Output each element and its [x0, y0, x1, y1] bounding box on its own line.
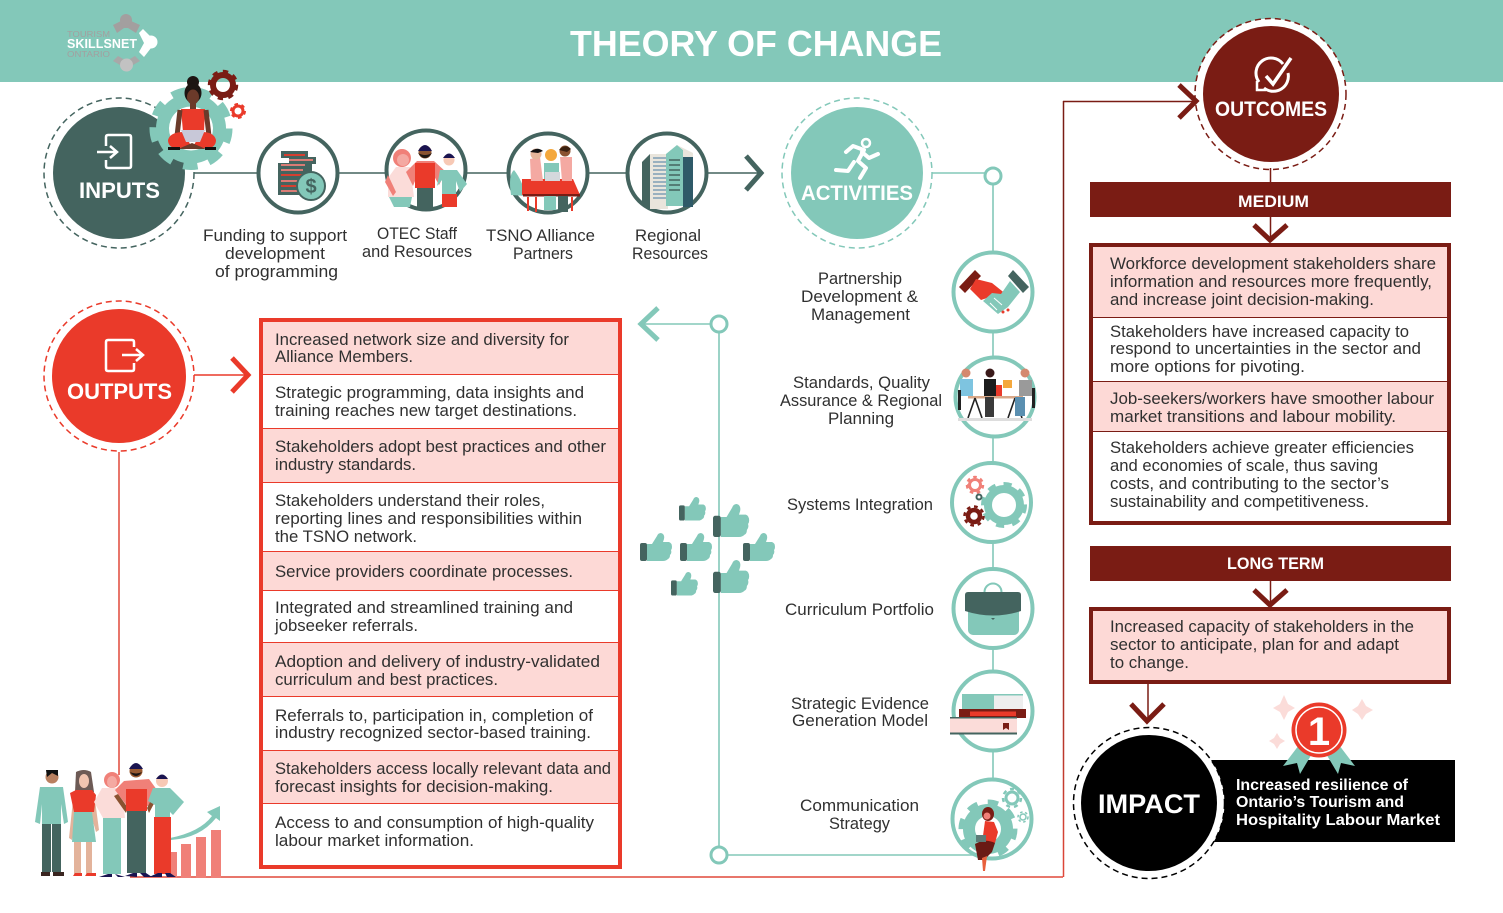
label [801, 269, 919, 324]
label: Assurance & Regional [780, 391, 942, 410]
icon: enter door [97, 135, 131, 168]
label [791, 694, 929, 730]
inputs circle [44, 98, 194, 248]
icon: gears [952, 463, 1031, 542]
icon: check cycle [1256, 58, 1291, 91]
output text rows: Alliance Members. [275, 347, 413, 366]
title: THEORY OF CHANGE [570, 23, 942, 64]
icon: handshake [954, 252, 1032, 332]
person 1 [35, 770, 68, 876]
label: OTEC staff [362, 224, 472, 261]
output text rows: curriculum and best practices. [275, 670, 498, 689]
output text rows: Stakeholders understand their roles, [275, 491, 545, 510]
activity: communication strategy [800, 780, 1032, 871]
output text rows: the TSNO network. [275, 527, 417, 546]
label: regional resources [632, 226, 708, 263]
person 5 [148, 774, 184, 877]
label: regional resources: Regional [635, 226, 701, 245]
medium text rows: and increase joint decision-making. [1110, 290, 1374, 309]
output text rows: industry recognized sector-based training. [275, 723, 591, 742]
activity: partnership [801, 252, 1032, 332]
output text rows: jobseeker referrals. [274, 616, 418, 635]
panel: medium outcomes [1091, 245, 1449, 523]
icon: TSNO alliance partners [508, 134, 588, 212]
arrow: long term [1254, 590, 1287, 605]
outcomes circle: OUTCOMES [1215, 98, 1327, 121]
activity: standards [780, 358, 1035, 436]
label: Communication [800, 796, 919, 815]
icon: meeting [956, 358, 1035, 436]
output text rows: Adoption and delivery of industry-validated [275, 652, 600, 671]
label [780, 373, 942, 428]
output text rows: Referrals to, participation in, completion of [275, 706, 593, 725]
label: regional resources: Resources [632, 244, 708, 263]
label: OTEC staff: OTEC Staff [377, 224, 457, 243]
header banner [0, 0, 1503, 82]
medium text rows: market transitions and labour mobility. [1110, 407, 1396, 426]
medium text rows: respond to uncertainties in the sector and [1110, 339, 1421, 358]
icon: medal number one: 1 [1308, 710, 1330, 754]
medium text rows: and economies of scale, thus saving [1110, 456, 1378, 475]
arrow: to impact [1131, 704, 1164, 721]
heading: medium [1090, 182, 1451, 217]
heading: long term [1090, 546, 1451, 581]
label: Systems Integration [787, 495, 933, 514]
output text rows: Stakeholders access locally relevant data and [275, 759, 611, 778]
label: funding: Funding to support [203, 226, 347, 245]
icon: regional resources [628, 134, 706, 212]
medium text rows [1110, 254, 1436, 511]
label: Strategy [829, 814, 890, 833]
heading: long term: LONG TERM [1227, 554, 1324, 573]
icon: running person [836, 139, 878, 178]
node circles [711, 168, 1001, 863]
panel: long term outcomes [1091, 609, 1449, 682]
medium text rows: Stakeholders have increased capacity to [1110, 322, 1409, 341]
icon: medal number one [1269, 695, 1373, 774]
arrow: outputs [232, 358, 248, 392]
label: Development & [801, 287, 919, 306]
label: Strategic Evidence [791, 694, 929, 713]
connector: inputs row [194, 172, 758, 174]
label: Partnership [818, 269, 902, 288]
bar chart [170, 830, 221, 878]
label: Planning [828, 409, 894, 428]
impact statement bar: Hospitality Labour Market [1236, 812, 1440, 829]
impact circle: IMPACT [1098, 789, 1200, 819]
icon: woman meditating on gears [154, 72, 245, 166]
medium text rows: more options for pivoting. [1110, 357, 1305, 376]
person 4 [114, 763, 158, 877]
label: TSNO alliance partners: TSNO Alliance [486, 226, 595, 245]
icon: OTEC staff [385, 130, 467, 210]
medium text rows: Stakeholders achieve greater efficiencies [1110, 438, 1414, 457]
arrow: medium [1254, 225, 1287, 240]
medium text rows: sustainability and competitiveness. [1110, 492, 1369, 511]
logo: Tourism SkillsNet Ontario: TOURISM [67, 29, 110, 39]
heading: medium: MEDIUM [1238, 192, 1309, 211]
output text rows: training reaches new target destinations. [275, 401, 577, 420]
output text rows: reporting lines and responsibilities within [275, 509, 582, 528]
activity: systems integration [787, 463, 1031, 542]
logo: Tourism SkillsNet Ontario: SKILLSNET [67, 37, 137, 51]
label: Standards, Quality [793, 373, 930, 392]
output text rows: labour market information. [275, 831, 474, 850]
arrow: into outcomes [1179, 85, 1196, 118]
activities circle: ACTIVITIES [801, 182, 913, 205]
label: TSNO alliance partners [486, 226, 595, 263]
outcomes circle [1195, 18, 1346, 170]
illustration: group of people with growth chart [35, 763, 221, 878]
impact statement bar: Ontario’s Tourism and [1236, 794, 1404, 811]
medium text rows: costs, and contributing to the sector’s [1110, 474, 1389, 493]
icon: funding [258, 134, 338, 212]
logo: Tourism SkillsNet Ontario: ONTARIO [67, 49, 110, 59]
output text rows: Strategic programming, data insights and [275, 383, 584, 402]
inputs circle: INPUTS [79, 178, 160, 203]
impact statement bar [1205, 760, 1455, 842]
panel: long term outcomes: Increased capacity of stakeholders in the [1110, 617, 1414, 636]
output text rows: industry standards. [275, 455, 416, 474]
output text rows: forecast insights for decision-making. [275, 777, 553, 796]
activity: strategic evidence [791, 672, 1032, 750]
impact statement bar: Increased resilience of [1236, 777, 1409, 794]
icon: woman on gears [952, 780, 1032, 871]
thumbs up cluster [640, 497, 775, 596]
label: Curriculum Portfolio [785, 600, 934, 619]
label: OTEC staff: and Resources [362, 242, 472, 261]
person 2 [69, 770, 99, 876]
arrow: inputs to activities [746, 156, 761, 190]
panel: long term outcomes: to change. [1110, 653, 1189, 672]
medium text rows: Job-seekers/workers have smoother labour [1110, 389, 1434, 408]
activity: curriculum portfolio [785, 569, 1032, 648]
output text rows: Integrated and streamlined training and [275, 598, 573, 617]
logo: Tourism SkillsNet Ontario [67, 14, 158, 72]
output text rows [274, 330, 611, 850]
icon: briefcase [954, 569, 1032, 648]
label: funding: of programming [215, 262, 338, 281]
label: funding [203, 226, 347, 281]
activities circle [782, 98, 932, 248]
output text rows: Service providers coordinate processes. [275, 562, 573, 581]
panel: outputs list [261, 320, 620, 867]
label: Management [811, 305, 910, 324]
connector: impact return line [119, 101, 1193, 877]
panel: long term outcomes: sector to anticipate, plan for and adapt [1110, 635, 1399, 654]
label [800, 796, 919, 833]
label: TSNO alliance partners: Partners [513, 244, 573, 263]
connector: activities trunk [644, 173, 993, 855]
icon: exit door [106, 340, 143, 371]
person 3 [94, 772, 125, 877]
output text rows: Increased network size and diversity for [275, 330, 569, 349]
outputs circle: OUTPUTS [67, 379, 172, 404]
label: funding: development [225, 244, 325, 263]
medium text rows: Workforce development stakeholders share [1110, 254, 1436, 273]
icon: books [950, 672, 1032, 750]
output text rows: Access to and consumption of high-quality [275, 813, 594, 832]
arrow: activities to outputs [641, 308, 658, 340]
outputs circle [44, 301, 194, 451]
output text rows: Stakeholders adopt best practices and other [275, 437, 606, 456]
connectors: outcomes column [1148, 168, 1270, 720]
icon: funding: $ [305, 176, 317, 198]
medium text rows: information and resources more frequently, [1110, 272, 1432, 291]
label: Generation Model [792, 711, 928, 730]
impact circle [1074, 728, 1224, 878]
